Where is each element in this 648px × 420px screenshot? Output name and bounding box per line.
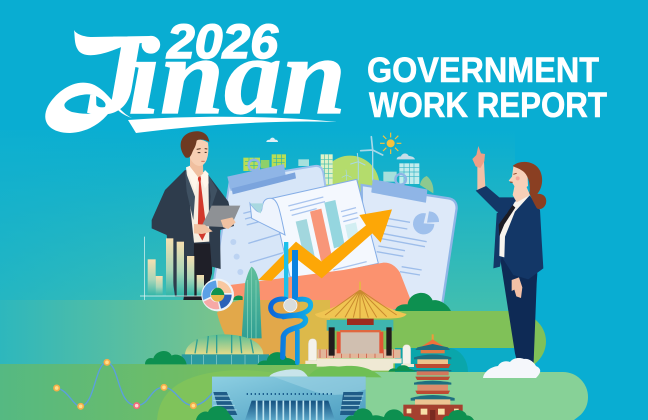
stele right bbox=[403, 345, 411, 364]
heading: Government Work Report bbox=[367, 51, 607, 125]
flourish: J lower loop bbox=[45, 83, 132, 133]
white cloud under the woman bbox=[483, 358, 540, 378]
band: pale green bbox=[350, 372, 588, 420]
line chart with dots bbox=[54, 360, 213, 409]
plinth bbox=[317, 358, 402, 371]
businesswoman pointing up bbox=[472, 146, 546, 370]
hair bbox=[181, 131, 209, 158]
neck bbox=[190, 157, 203, 177]
pie chart icon bbox=[413, 211, 439, 234]
trousers bbox=[183, 240, 213, 300]
roof bbox=[315, 288, 407, 319]
right clipboard bbox=[362, 174, 457, 308]
bushes bbox=[145, 295, 298, 365]
heading: Government Work Report: WORK REPORT bbox=[369, 86, 607, 125]
script word Jinan: J bbox=[87, 11, 149, 138]
band: lower green bbox=[0, 364, 360, 420]
plaque bbox=[347, 319, 374, 325]
Jinan landmarks left group bbox=[145, 267, 298, 365]
year 2026: 2026 bbox=[166, 16, 278, 69]
small bar chart beside the man bbox=[140, 237, 207, 303]
icon: sun bbox=[380, 133, 401, 154]
icon: wind turbines bbox=[342, 137, 383, 180]
green landscape bands bbox=[0, 300, 588, 420]
stele left bbox=[308, 339, 317, 361]
left clipboard bbox=[210, 160, 343, 306]
folder bbox=[227, 263, 414, 309]
raised forearm bbox=[477, 162, 485, 191]
band: blue gap bbox=[395, 348, 517, 372]
city skyline and green energy scene bbox=[243, 133, 433, 214]
bush near city hall bbox=[196, 406, 234, 420]
flourish: J top flag bbox=[74, 30, 150, 55]
donut chart bbox=[201, 279, 234, 311]
eyes and brows bbox=[197, 147, 207, 151]
tie bbox=[197, 176, 207, 241]
hill: light green ellipse bbox=[157, 370, 350, 420]
pillars with couplets bbox=[329, 327, 335, 356]
hand at side bbox=[512, 277, 522, 298]
shirt bbox=[499, 195, 530, 257]
hill: ochre bbox=[217, 300, 320, 364]
jacket bbox=[152, 170, 234, 297]
lapels bbox=[185, 170, 217, 220]
businessman with tablet bbox=[152, 131, 240, 300]
tall tower bbox=[242, 267, 262, 338]
report documents bbox=[210, 160, 457, 309]
icon: clouds bbox=[266, 138, 415, 159]
shirt bbox=[186, 167, 209, 243]
growth arrow bbox=[258, 209, 392, 281]
temple hall bbox=[327, 320, 393, 331]
hair and bun bbox=[513, 162, 546, 209]
jacket bbox=[493, 196, 543, 279]
foreground bushes bbox=[345, 365, 474, 420]
pagoda bbox=[345, 334, 474, 420]
hands bbox=[194, 217, 236, 234]
side stairs bbox=[213, 392, 363, 415]
quancheng fountain sculpture bbox=[271, 242, 311, 363]
face bbox=[509, 165, 528, 191]
raised sleeve bbox=[476, 186, 515, 214]
facial details bbox=[510, 173, 517, 182]
bush behind temple bbox=[395, 293, 451, 311]
face bbox=[187, 139, 208, 166]
domed building and city hall bbox=[212, 366, 382, 420]
hall facade bbox=[212, 377, 366, 420]
title: 2026 Jinan bbox=[45, 11, 346, 138]
heading: Government Work Report: GOVERNMENT bbox=[367, 51, 599, 90]
hand bbox=[472, 146, 485, 168]
tie bbox=[499, 205, 515, 236]
small dome bbox=[269, 369, 308, 377]
temple pavilion bbox=[305, 282, 451, 371]
icon: leaf tree bbox=[420, 176, 433, 193]
tablet bbox=[202, 206, 240, 227]
band: teal strip bbox=[395, 348, 468, 372]
band: upper green bbox=[0, 300, 546, 372]
flourish: underline swash bbox=[128, 117, 337, 133]
centre paper with bar chart bbox=[250, 179, 378, 280]
neck bbox=[513, 183, 530, 202]
domed stadium bbox=[182, 334, 269, 364]
hill right of hall bbox=[308, 366, 382, 377]
script word Jinan: inan bbox=[128, 15, 346, 137]
colonnade bbox=[245, 401, 335, 420]
trousers bbox=[500, 253, 537, 370]
